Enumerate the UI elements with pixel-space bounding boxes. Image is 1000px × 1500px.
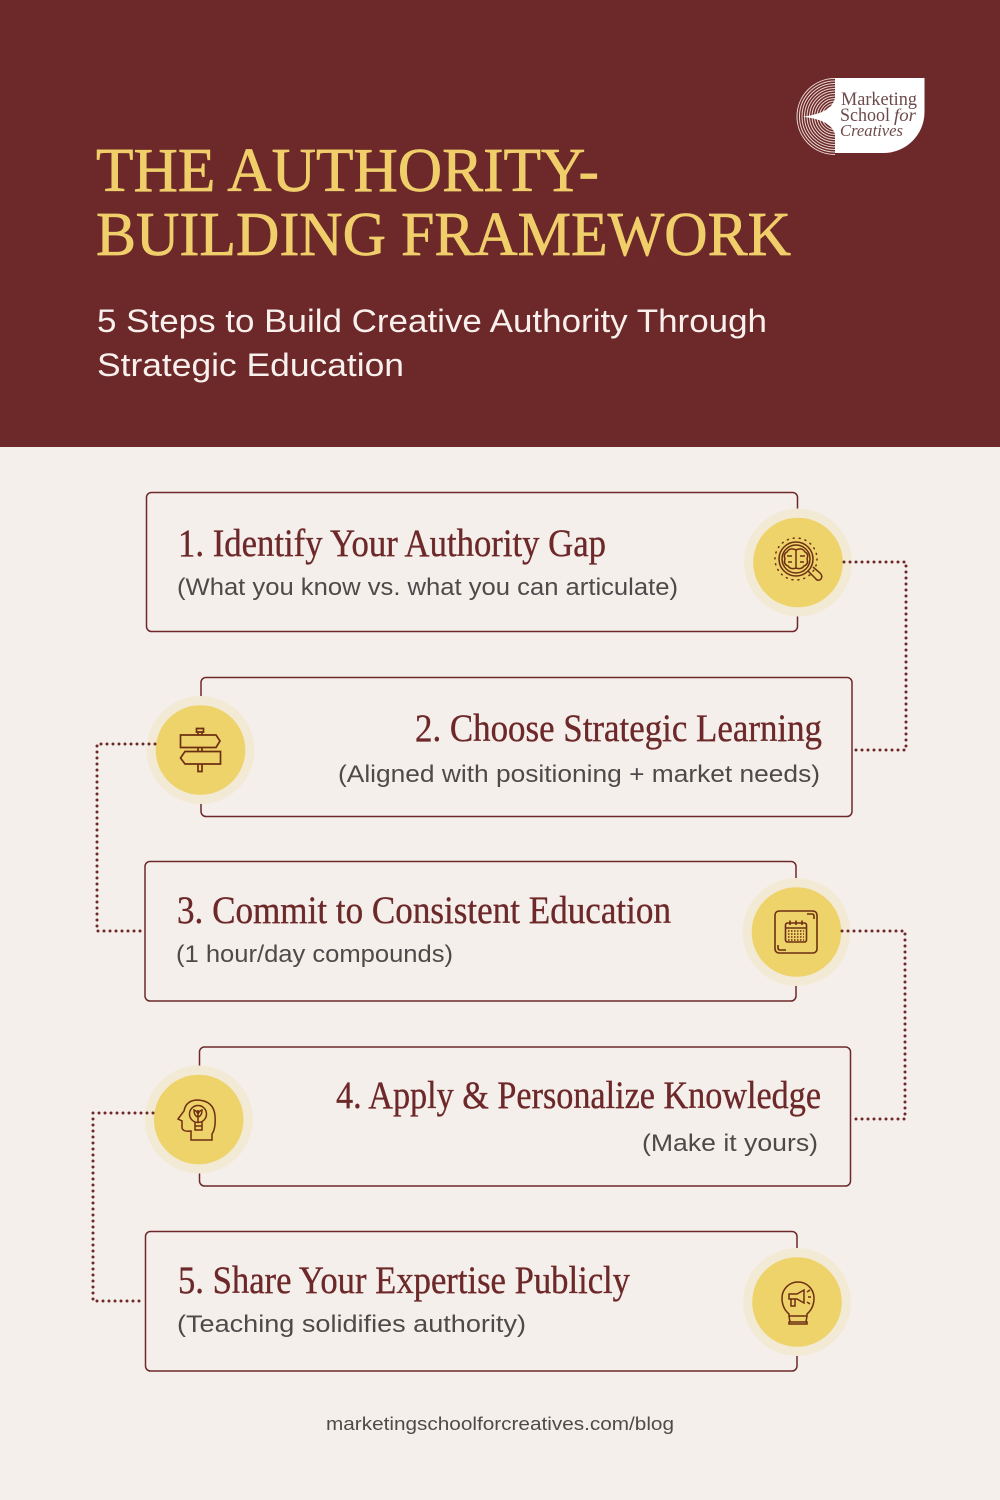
icon: signpost: [146, 696, 254, 804]
logo: Marketing: [841, 89, 917, 110]
title: THE AUTHORITY-: [96, 137, 599, 205]
icon: megaphone in light bulb: [743, 1248, 851, 1356]
step 2 description: (Aligned with positioning + market needs): [338, 761, 820, 788]
logo: Creatives: [840, 121, 903, 140]
footer URL: marketingschoolforcreatives.com/blog: [326, 1413, 674, 1434]
title: BUILDING FRAMEWORK: [96, 201, 791, 269]
step 4 description: (Make it yours): [642, 1130, 818, 1157]
step 5 description: (Teaching solidifies authority): [177, 1311, 526, 1338]
subtitle: [97, 303, 767, 383]
icon: calendar: [742, 878, 850, 986]
subtitle: 5 Steps to Build Creative Authority Through: [97, 303, 767, 339]
panel: step 2: [146, 678, 852, 816]
connector: step 4 to step 5: [93, 1113, 153, 1301]
step 1 heading: 1. Identify Your Authority Gap: [178, 522, 606, 565]
header panel: [0, 0, 1000, 447]
step 5 heading: 5. Share Your Expertise Publicly: [178, 1259, 630, 1302]
icon: brain under magnifying glass: [744, 508, 852, 616]
panel: step 5: [146, 1232, 851, 1371]
connector: step 2 to step 3: [97, 744, 155, 931]
step 1 description: (What you know vs. what you can articulate): [177, 574, 678, 601]
step 4 heading: 4. Apply & Personalize Knowledge: [336, 1074, 821, 1117]
step 2 heading: 2. Choose Strategic Learning: [415, 707, 822, 750]
connector: step 1 to step 2: [844, 562, 906, 750]
connector: step 3 to step 4: [842, 931, 905, 1119]
panel: step 4: [145, 1047, 850, 1186]
subtitle: Strategic Education: [97, 347, 404, 383]
icon: head with light bulb: [145, 1066, 253, 1174]
step 3 heading: 3. Commit to Consistent Education: [177, 889, 671, 932]
logo: for: [894, 105, 917, 125]
panel: step 3: [145, 862, 850, 1001]
panel: step 1: [146, 492, 852, 632]
logo: School: [840, 105, 890, 126]
logo: [797, 78, 924, 154]
step 3 description: (1 hour/day compounds): [176, 941, 453, 968]
title: [96, 137, 791, 269]
